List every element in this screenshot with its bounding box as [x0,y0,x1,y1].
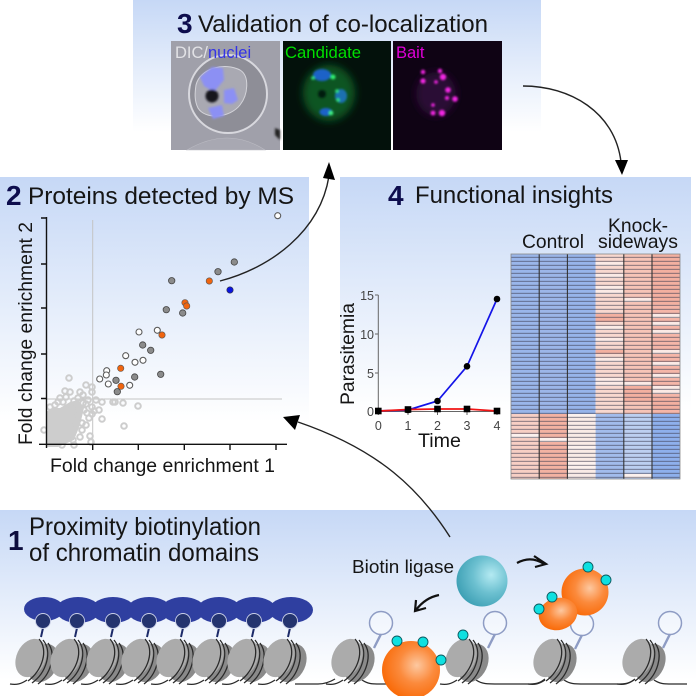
heading: proximity biotinylation: Proximity biotinylation [29,513,261,541]
arrow: validation to functional insights [523,86,628,175]
knock-sideways series [375,406,500,414]
micrograph: bait channel: Bait [396,44,425,62]
arrow: biotinylation to MS [283,415,450,537]
axes [39,217,287,450]
biotin ligase [352,556,508,606]
heading: functional insights: Functional insights [415,182,613,209]
biotinylated protein on chromatin [382,630,468,696]
open chromatin nucleosomes [325,612,682,687]
panel: proteins detected by MS [0,177,309,477]
y ticks: 10 [360,328,374,342]
biotinylated protein complex [534,562,611,635]
open chromatin linker DNA [362,679,687,684]
micrograph: candidate channel [283,41,391,150]
y axis label: Fold change enrichment 2 [15,222,37,445]
heading: validation of co-localization: Validation of co-localization [198,11,488,38]
enriched proteins [97,213,281,388]
orange proteins [118,278,212,389]
line chart: parasitemia over time [338,289,501,452]
y axis title: Parasitemia [338,303,359,405]
heading: proximity biotinylation [8,513,261,567]
x ticks: 1 [405,419,412,433]
biotin ligase: Biotin ligase [352,557,454,578]
micrograph: DIC and nuclei: DIC/nuclei [175,44,251,62]
control series [375,296,500,414]
x ticks [375,419,501,433]
x ticks: 3 [464,419,471,433]
chromatin fibre: modified nucleosomes [9,634,335,687]
y ticks: 15 [360,289,374,303]
panel: functional insights [338,177,691,479]
scatter plot: fold change enrichment [15,213,287,477]
x axis label: Fold change enrichment 1 [50,455,275,477]
x ticks: 0 [375,419,382,433]
y ticks [360,289,374,419]
heatmap [511,216,680,479]
column headers: Control [522,232,584,253]
micrograph: DIC and nuclei [171,41,280,150]
heading: proteins detected by MS: 2 [6,180,22,211]
background proteins [41,375,141,448]
bait protein [227,287,233,293]
x ticks: 4 [494,419,501,433]
heading: functional insights: 4 [388,180,404,211]
panel: proximity biotinylation of chromatin domains [0,510,696,696]
heading: proteins detected by MS: Proteins detected by MS [28,183,294,210]
arrow: ligase to complex [517,556,546,567]
panel: validation of co-localization [133,0,541,150]
y ticks: 5 [367,367,374,381]
y ticks: 0 [367,405,374,419]
column headers [522,216,678,253]
micrograph: candidate channel: Candidate [285,44,361,62]
column headers: sideways [598,232,678,253]
threshold lines [47,220,282,444]
micrograph: bait channel [393,41,502,150]
x ticks: 2 [434,419,441,433]
HP1-like protein domain [24,597,313,623]
arrow: ligase to chromatin [415,595,439,611]
column headers: Knock- [608,216,668,237]
heading: validation of co-localization: 3 [177,8,193,39]
upper cluster [511,254,680,414]
lower cluster [511,414,680,479]
x axis title: Time [418,431,461,452]
arrow: MS hits to validation [220,162,335,281]
candidate proteins [113,259,238,395]
heading: proximity biotinylation: of chromatin domains [29,539,259,567]
histone tails with bound residues [36,614,298,637]
heading: proximity biotinylation: 1 [8,525,24,556]
